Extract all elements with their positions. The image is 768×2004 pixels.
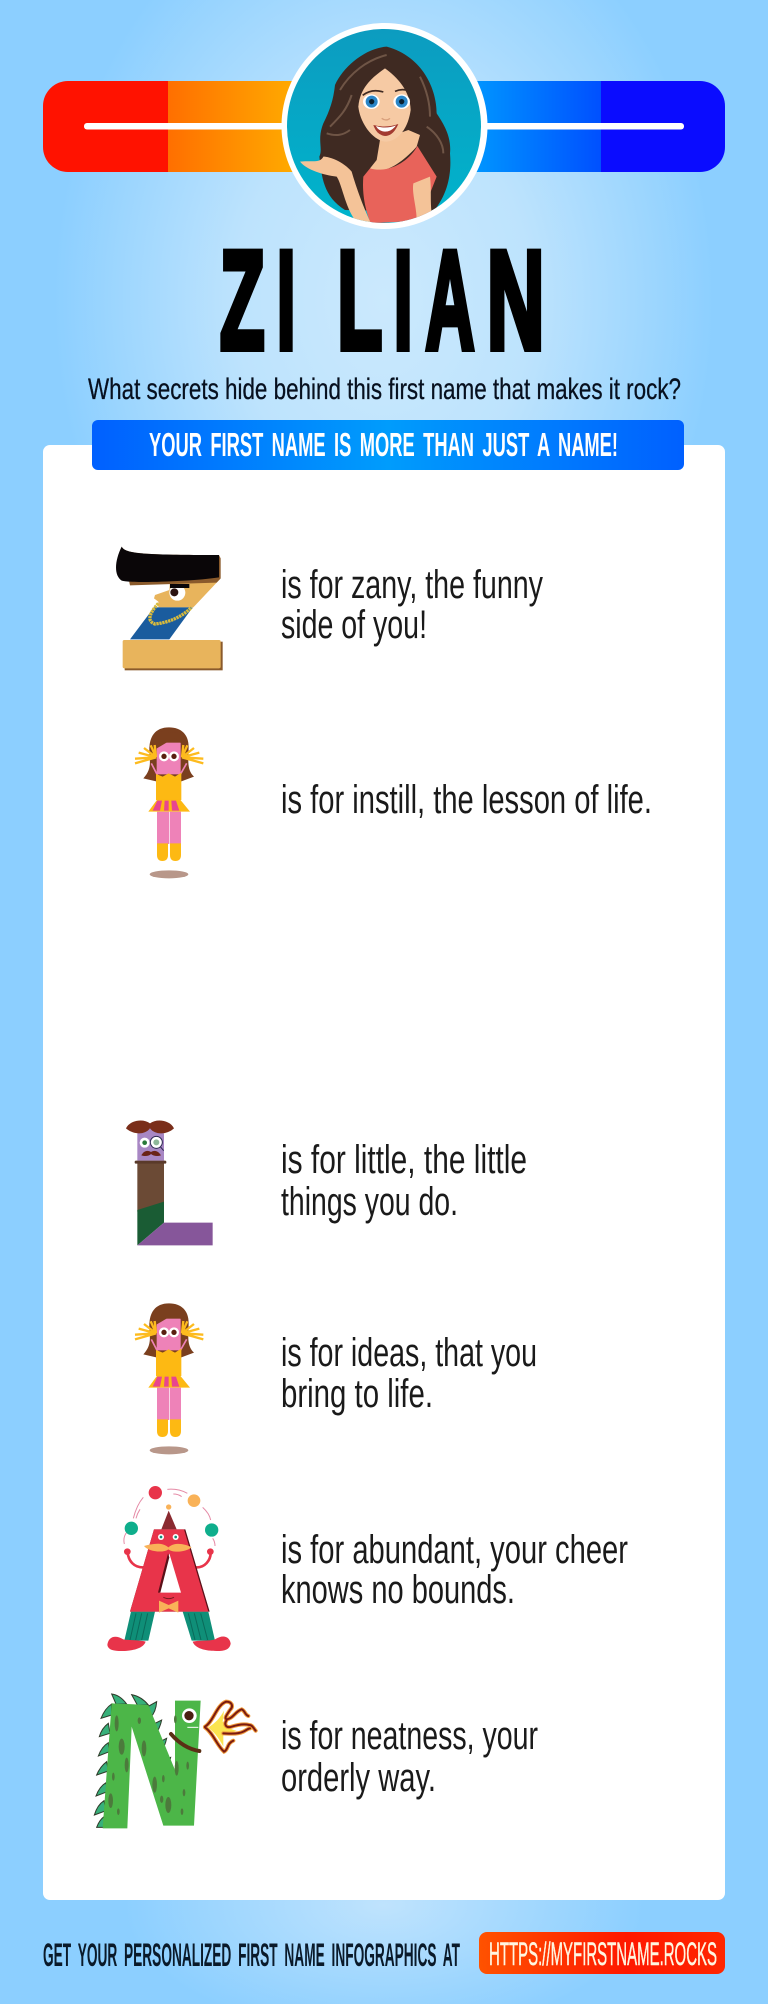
title: I: [277, 222, 296, 378]
row text: L: is for little, the little: [281, 1138, 527, 1182]
header colour bar: [43, 81, 725, 172]
row text: I second: is for ideas, that you: [281, 1331, 537, 1375]
icon: letter A juggling clown: [107, 1486, 231, 1651]
icon: letter N dragon: [94, 1694, 256, 1828]
avatar: smiling woman in circle: [282, 23, 488, 229]
row text: A: knows no bounds.: [281, 1568, 515, 1612]
title: I: [394, 222, 412, 378]
row text: N: orderly way.: [281, 1756, 436, 1800]
icon: letter Z character: [116, 547, 223, 670]
row text: A: [281, 1528, 628, 1612]
row text: Z: [281, 563, 543, 647]
row text: I second: [281, 1331, 537, 1416]
icon: letter L character: [126, 1121, 213, 1245]
row text: L: [281, 1138, 527, 1224]
icon: letter I cheerleader second: [135, 1303, 203, 1454]
title: [220, 222, 544, 378]
title: L: [337, 222, 382, 378]
row text: A: is for abundant, your cheer: [281, 1528, 628, 1572]
white content panel: [43, 445, 725, 1900]
title: N: [487, 222, 544, 378]
row text: I second: bring to life.: [281, 1372, 433, 1416]
title: Z: [220, 222, 265, 378]
banner: [92, 420, 684, 470]
title: A: [426, 222, 474, 378]
row text: N: is for neatness, your: [281, 1714, 538, 1758]
row text: Z: side of you!: [281, 603, 427, 647]
row text: L: things you do.: [281, 1180, 458, 1224]
icon: letter I cheerleader: [135, 727, 203, 878]
row text: N: [281, 1714, 538, 1800]
row text: Z: is for zany, the funny: [281, 563, 543, 607]
